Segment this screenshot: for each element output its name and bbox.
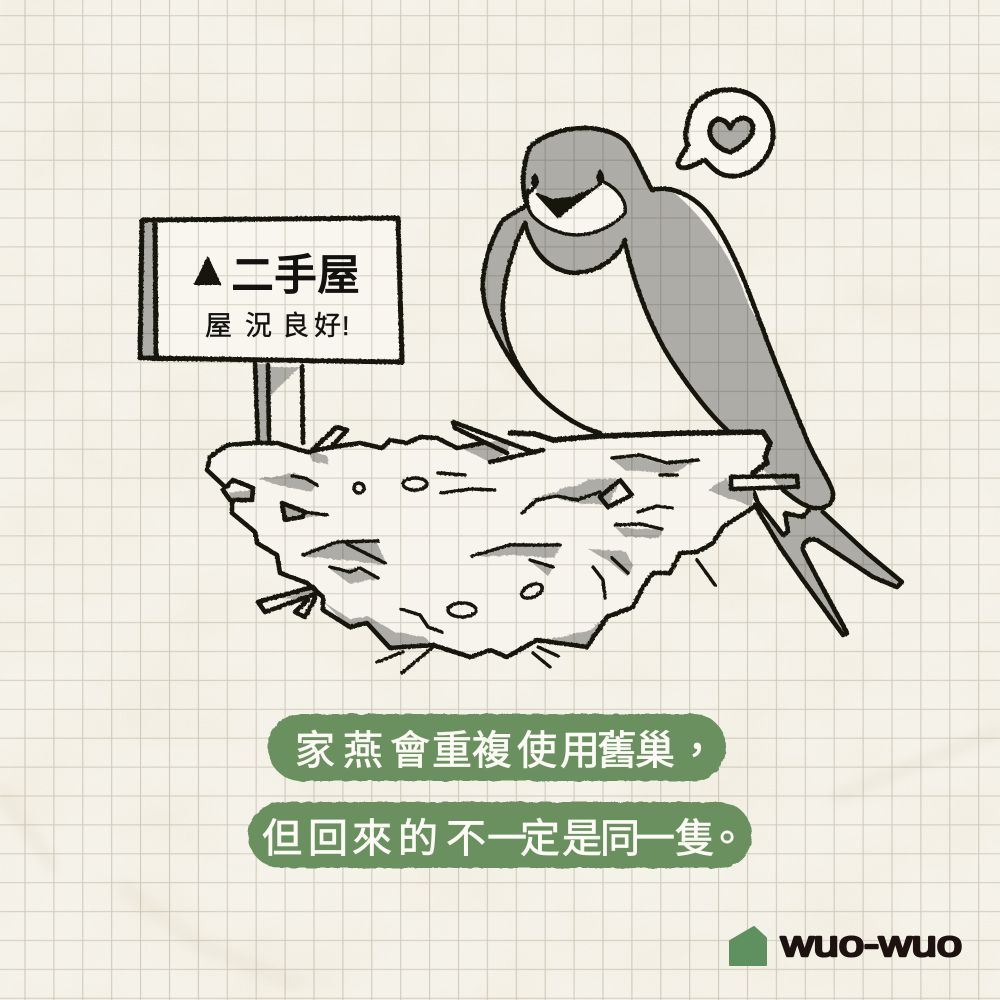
speech bubble with heart bbox=[678, 90, 773, 176]
nest outline bbox=[207, 443, 382, 485]
caption pill: line 2: 但回來的不一定是同一隻。 bbox=[262, 817, 747, 861]
swallow body bbox=[483, 128, 902, 635]
sign text: 二手屋: 二手屋 bbox=[231, 252, 360, 300]
icon: green house bbox=[730, 927, 766, 965]
illustration: swallow on nest with sign bbox=[140, 90, 902, 673]
caption pill: line 1 bbox=[268, 714, 726, 781]
nest sticks bbox=[310, 427, 347, 452]
sign board bbox=[140, 218, 402, 443]
caption pill: line 1: 家燕會重複使用舊巢， bbox=[295, 729, 717, 773]
nest shadows bbox=[230, 440, 753, 650]
wordmark: wuo-wuo bbox=[780, 923, 962, 964]
nest straw strokes bbox=[292, 473, 495, 515]
sign text: 屋況良好: 屋況良好! bbox=[205, 311, 350, 341]
nest bbox=[207, 422, 798, 673]
caption pill: line 2 bbox=[248, 802, 752, 868]
logo: house icon and wordmark bbox=[730, 923, 962, 965]
nest pebbles bbox=[223, 480, 253, 500]
